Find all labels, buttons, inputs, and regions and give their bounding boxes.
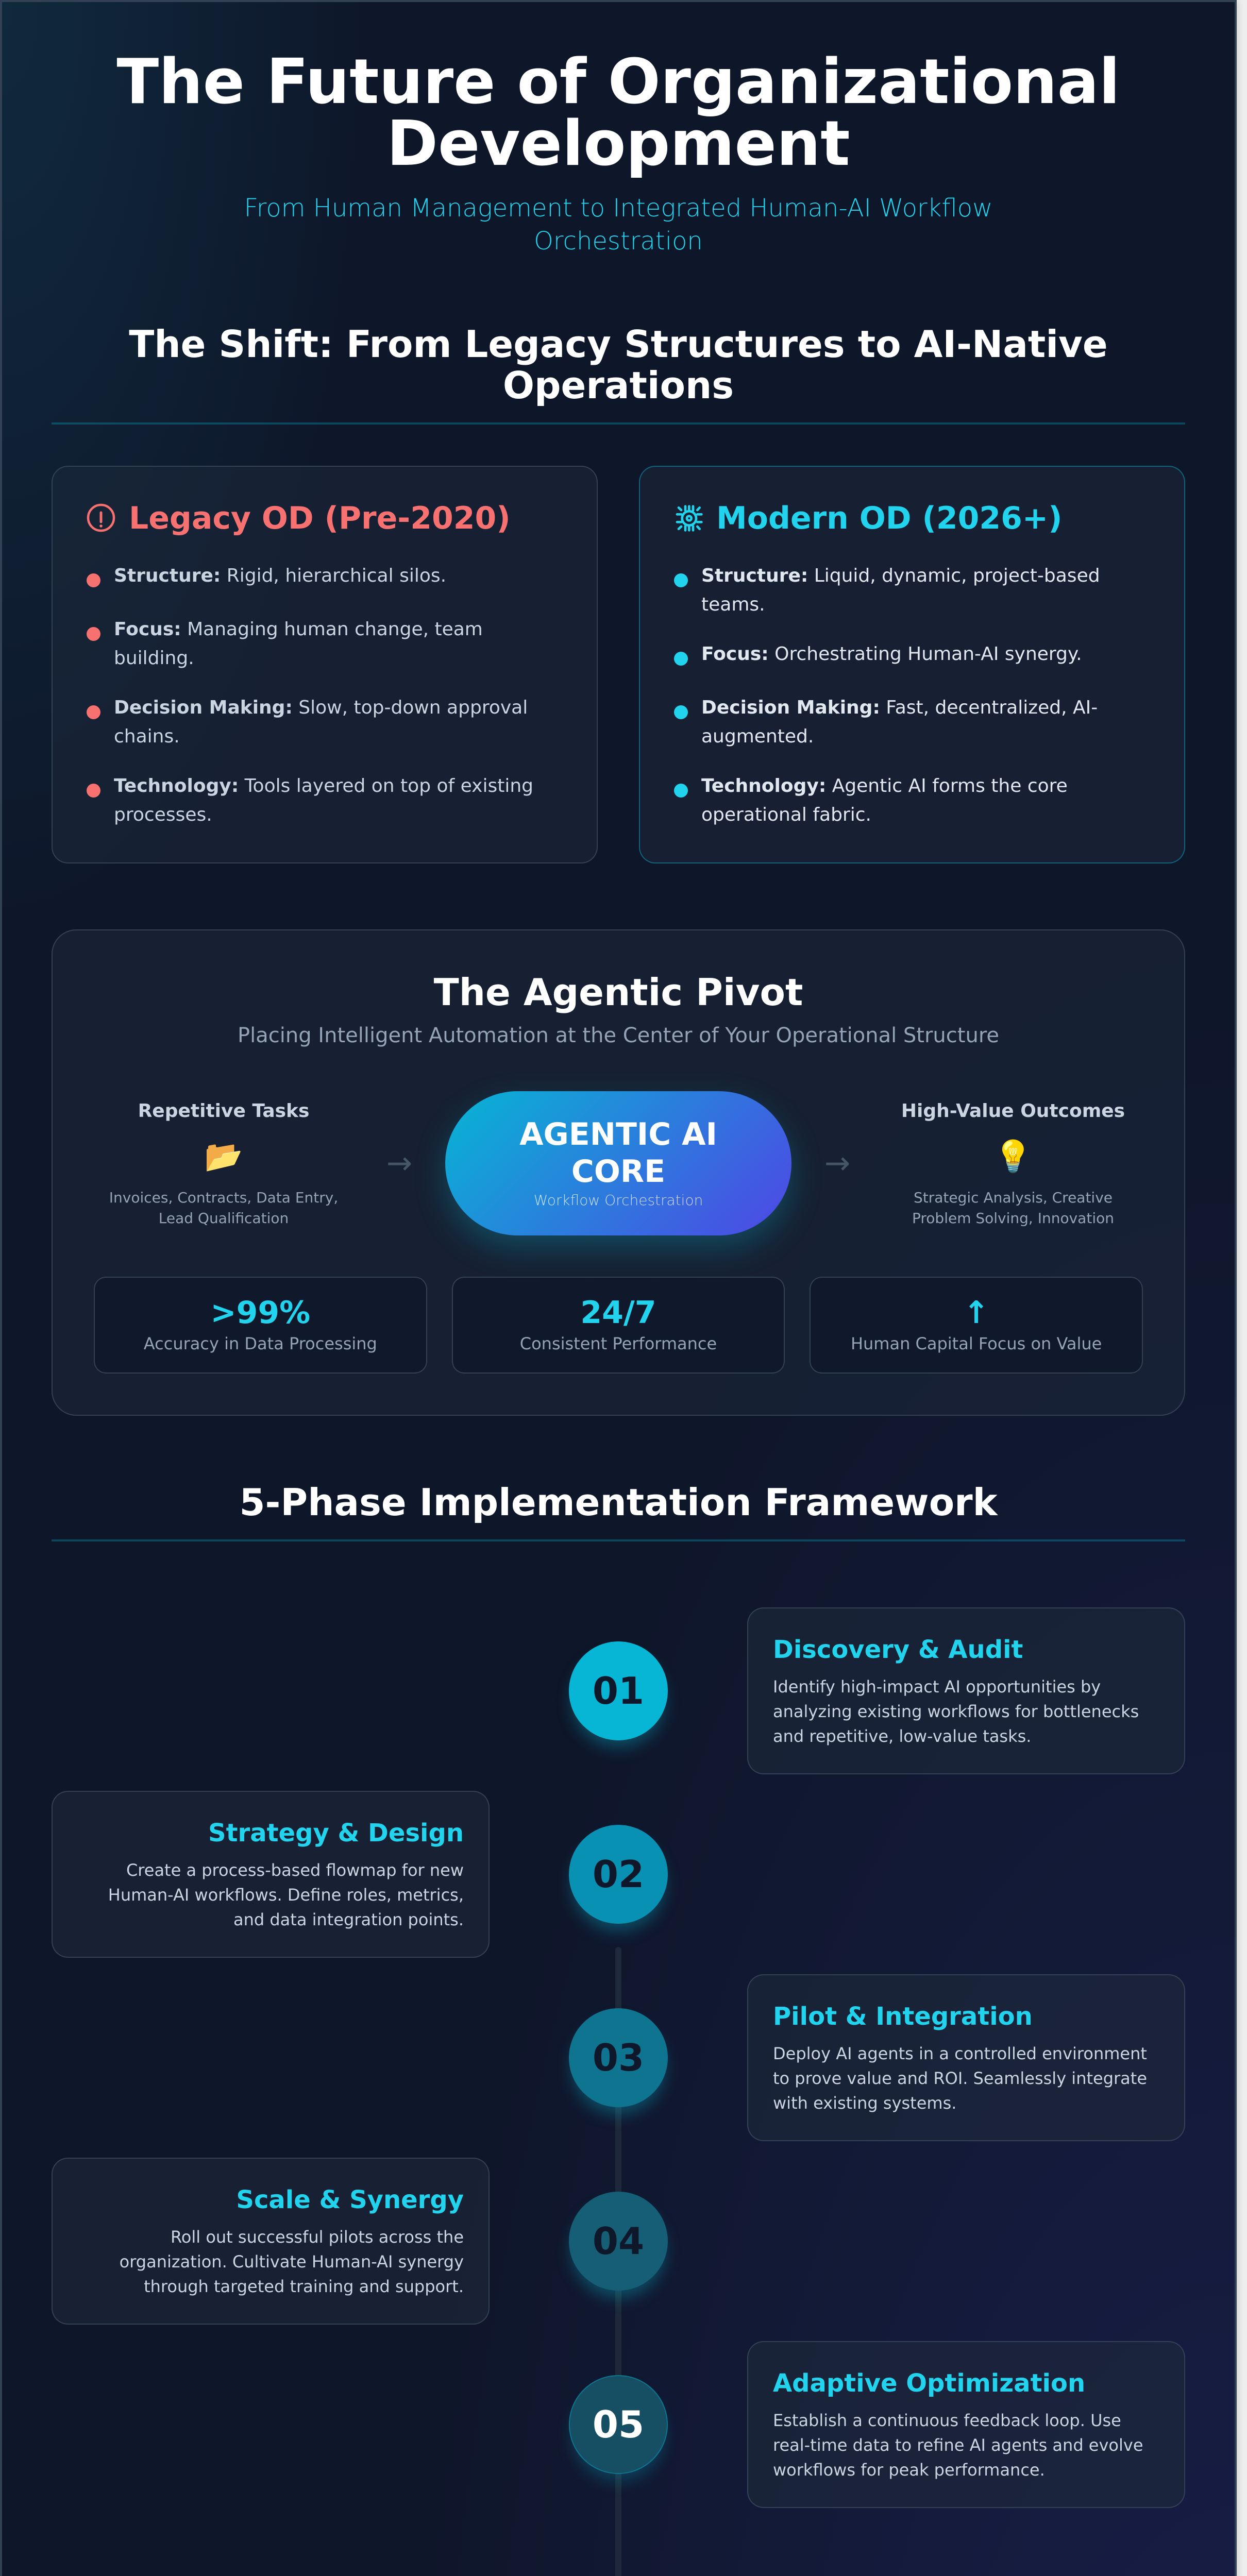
panel: the agentic pivot (52, 929, 1185, 1416)
phase 1 node: 01 (593, 1669, 644, 1713)
item: decision making: Decision Making: Slow, top-down approval (114, 697, 528, 718)
subtitle (244, 194, 992, 256)
bullet: decision making (87, 705, 100, 719)
item: decision making (701, 697, 1098, 747)
item: technology: Technology: Tools layered on top of existing (114, 775, 533, 796)
item: technology: processes. (114, 804, 212, 825)
phase 3 node (569, 2008, 668, 2107)
input caption (109, 1189, 338, 1227)
panel: modern OD (639, 466, 1185, 863)
section heading: the shift (52, 324, 1185, 425)
title: Development (386, 108, 850, 180)
phase 2 description: and data integration points. (233, 1910, 464, 1929)
phase 1 description: analyzing existing workflows for bottlenecks (773, 1702, 1139, 1721)
icon: folder: 📂 (205, 1139, 243, 1175)
phase 1 description (773, 1677, 1139, 1746)
phase 1 description: and repetitive, low-value tasks. (773, 1726, 1031, 1746)
phase 5 description: Establish a continuous feedback loop. Use (773, 2411, 1121, 2430)
item: structure: Structure: Liquid, dynamic, project-based (701, 565, 1100, 586)
icon: AI core chip (676, 505, 703, 532)
input title: Repetitive Tasks (138, 1100, 309, 1122)
output caption: Problem Solving, Innovation (912, 1210, 1114, 1227)
phase 5 description: workflows for peak performance. (773, 2460, 1045, 2480)
core sublabel: Workflow Orchestration (534, 1192, 703, 1209)
item: decision making: Decision Making: Fast, decentralized, AI- (701, 697, 1098, 718)
subtitle: Orchestration (534, 227, 703, 256)
title (116, 46, 1120, 180)
timeline: five phases (52, 1607, 1185, 2508)
bullet: structure (87, 573, 100, 587)
stat: uptime (452, 1277, 785, 1374)
phase 2 title: Strategy & Design (208, 1819, 464, 1848)
arrow: core to outcomes: → (824, 1145, 850, 1181)
bullet: focus (674, 652, 688, 666)
item: structure (701, 565, 1100, 615)
stat label: Human Capital Focus on Value (851, 1334, 1102, 1353)
bullet: focus (87, 627, 100, 641)
phase 4 card (52, 2158, 490, 2325)
agentic AI core pill (445, 1091, 791, 1235)
header (116, 46, 1120, 256)
phase 4 node: 04 (593, 2219, 644, 2263)
pivot heading: The Agentic Pivot (434, 971, 803, 1014)
phase 5 description (773, 2408, 1159, 2482)
item: technology (114, 775, 533, 825)
item: technology: Technology: Agentic AI forms the core (701, 775, 1068, 796)
stat value: 24/7 (580, 1295, 656, 1331)
phase 1 description: Identify high-impact AI opportunities by (773, 1677, 1101, 1697)
section heading: the shift: Operations (503, 364, 734, 407)
input caption: Invoices, Contracts, Data Entry, (109, 1189, 338, 1206)
stat: accuracy (94, 1277, 427, 1374)
phase 4 node (569, 2192, 668, 2291)
stat: human capital (810, 1277, 1143, 1374)
phase 4 description: organization. Cultivate Human-AI synergy (120, 2252, 464, 2272)
phase 4 title: Scale & Synergy (236, 2185, 464, 2214)
item: focus (114, 619, 483, 669)
core label: AGENTIC AI (519, 1116, 717, 1153)
item: technology: operational fabric. (701, 804, 871, 825)
phase 3 title: Pilot & Integration (773, 2002, 1033, 2031)
icon: alert circle (87, 504, 115, 532)
item: structure: Structure: Rigid, hierarchical silos. (114, 565, 446, 586)
phase 5 description: real-time data to refine AI agents and evolve (773, 2435, 1143, 2455)
item: focus: building. (114, 648, 194, 669)
phase 3 node: 03 (593, 2036, 644, 2079)
item: focus: Focus: Managing human change, team (114, 619, 483, 640)
icon: light bulb: 💡 (994, 1139, 1032, 1175)
item: decision making (114, 697, 528, 747)
bullet: structure (674, 573, 688, 587)
phase 5 card (747, 2341, 1185, 2508)
phase 3 description (773, 2044, 1147, 2113)
heading: modern: Modern OD (2026+) (716, 500, 1063, 536)
section heading: framework (52, 1482, 1185, 1541)
item: focus: Focus: Orchestrating Human-AI synergy. (701, 643, 1082, 665)
stat label: Accuracy in Data Processing (144, 1334, 377, 1353)
phase 2 description: Create a process-based flowmap for new (126, 1860, 464, 1880)
phase 3 description: with existing systems. (773, 2093, 956, 2113)
phase 4 description: Roll out successful pilots across the (171, 2227, 464, 2247)
phase 1 card (747, 1607, 1185, 1774)
phase 3 description: Deploy AI agents in a controlled environment (773, 2044, 1147, 2063)
item: decision making: augmented. (701, 726, 814, 747)
phase 4 description: through targeted training and support. (144, 2277, 464, 2296)
phase 2 node: 02 (593, 1853, 644, 1896)
arrow: tasks to core: → (386, 1145, 412, 1181)
phase 3 description: to prove value and ROI. Seamlessly integrate (773, 2069, 1147, 2088)
output column: high-value outcomes (901, 1100, 1125, 1227)
phase 3 card (747, 1974, 1185, 2141)
item: technology (701, 775, 1068, 825)
phase 2 description: Human-AI workflows. Define roles, metrics, (108, 1885, 464, 1905)
phase 4 description (77, 2225, 464, 2299)
timeline connector line (615, 1947, 621, 2576)
bullet: technology (674, 784, 688, 798)
section heading: framework: 5-Phase Implementation Framework (239, 1481, 998, 1524)
item: decision making: chains. (114, 726, 180, 747)
output caption: Strategic Analysis, Creative (914, 1189, 1113, 1206)
heading: legacy: Legacy OD (Pre-2020) (129, 500, 511, 536)
stat label: Consistent Performance (520, 1334, 717, 1353)
output title: High-Value Outcomes (901, 1100, 1125, 1122)
panel: legacy OD (52, 466, 598, 863)
input caption: Lead Qualification (159, 1210, 289, 1227)
phase 1 node (569, 1641, 668, 1740)
stat value: ↑ (964, 1295, 989, 1331)
bullet: technology (87, 784, 100, 798)
title: The Future of Organizational (116, 46, 1120, 118)
phase 5 node: 05 (593, 2403, 644, 2446)
stat value: >99% (210, 1295, 310, 1331)
phase 5 title: Adaptive Optimization (773, 2369, 1085, 2398)
phase 1 title: Discovery & Audit (773, 1635, 1023, 1664)
item: structure: teams. (701, 594, 765, 615)
core label: CORE (571, 1154, 665, 1190)
phase 5 node (569, 2375, 668, 2474)
output caption (912, 1189, 1114, 1227)
phase 2 card (52, 1791, 490, 1958)
section heading: the shift: The Shift: From Legacy Structures to AI-Native (129, 323, 1108, 366)
phase 2 description (108, 1860, 464, 1929)
bullet: decision making (674, 705, 688, 719)
input column: repetitive tasks (109, 1100, 338, 1227)
core label (519, 1116, 717, 1190)
subtitle: From Human Management to Integrated Human-AI Workflow (244, 194, 992, 223)
phase 2 node (569, 1825, 668, 1924)
pivot subtitle: Placing Intelligent Automation at the Center of Your Operational Structure (238, 1024, 999, 1047)
